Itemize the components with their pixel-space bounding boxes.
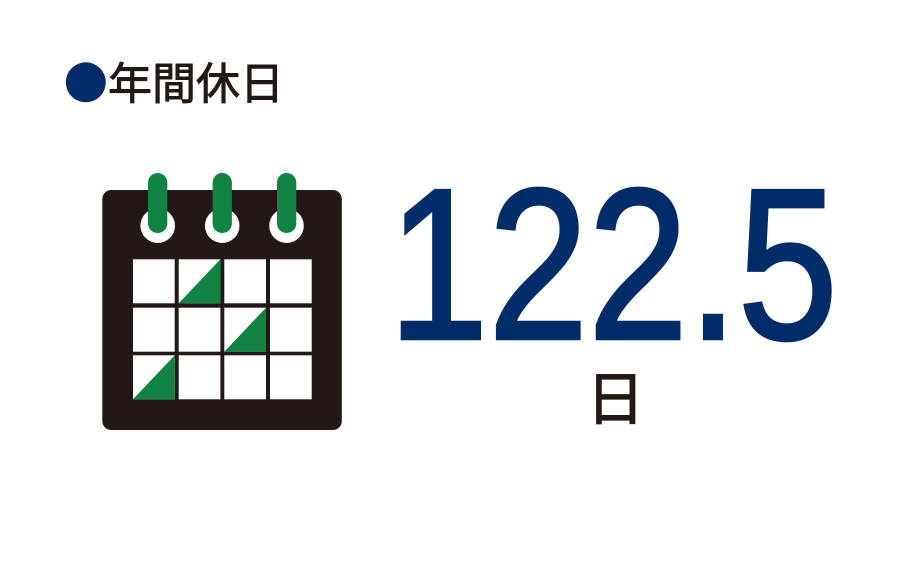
icon: navy bullet: [66, 62, 106, 102]
calendar body: [102, 190, 342, 430]
unit label: 日: [586, 368, 645, 432]
binder rings: [148, 173, 296, 233]
date cells: [133, 259, 312, 399]
heading text: 年間休日: [108, 60, 284, 109]
icon: calendar: [102, 173, 342, 430]
holiday markers: [133, 259, 266, 399]
heading: annual holidays: [66, 60, 284, 109]
binder holes: [140, 208, 304, 243]
big number: 122.5: [388, 144, 838, 384]
